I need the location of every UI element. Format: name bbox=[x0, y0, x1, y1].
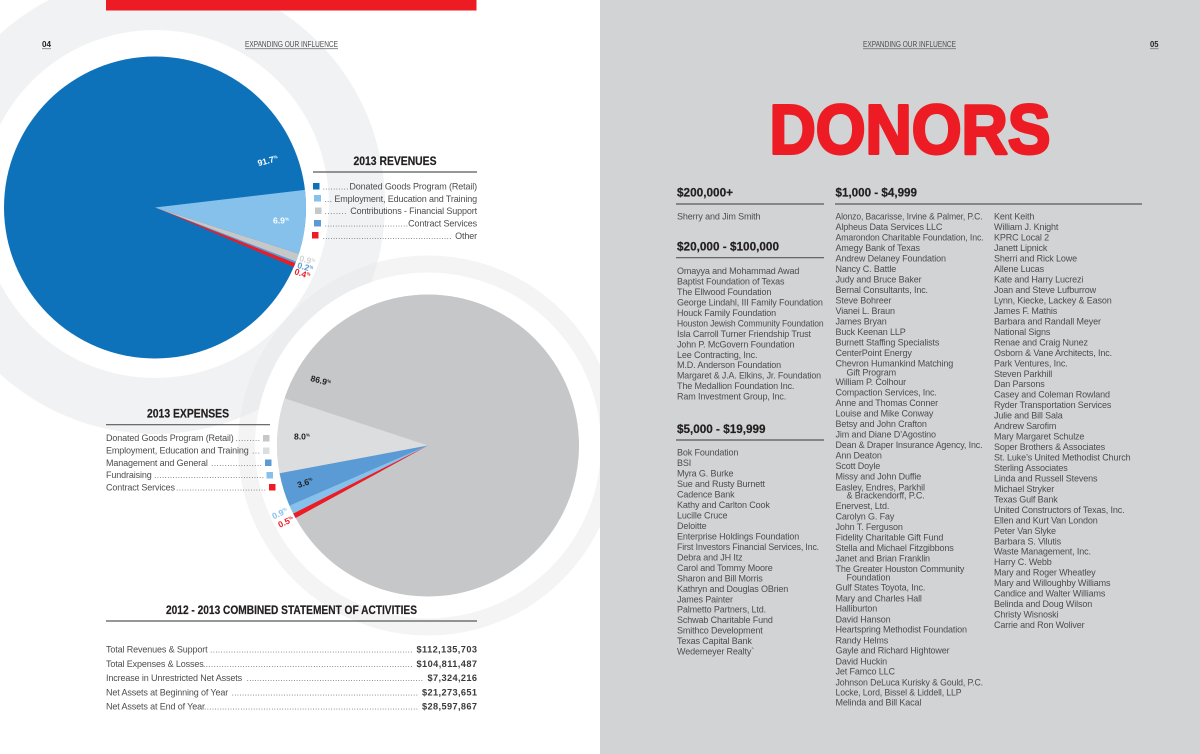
donors tier: $5,000 - $19,999: Bok Foundation bbox=[677, 448, 738, 458]
top red bar bbox=[106, 0, 476, 10]
donor list: column one: William P. Colhour bbox=[836, 377, 906, 387]
donor list: column one: Foundation bbox=[846, 572, 890, 582]
donor list: column two: Dan Parsons bbox=[994, 379, 1045, 389]
donor list: column one: Buck Keenan LLP bbox=[836, 327, 906, 337]
donors tier: $5,000 - $19,999: First Investors Financial Services, Inc. bbox=[677, 542, 819, 552]
label: 3.6%: 3.6 bbox=[296, 477, 310, 490]
donor list: column two: Kent Keith bbox=[994, 212, 1034, 222]
donor list: column one: Easley, Endres, Parkhil bbox=[836, 482, 925, 492]
row: net assets end bbox=[106, 702, 477, 712]
donor list: column one: Carolyn G. Fay bbox=[836, 511, 895, 521]
donor list: column two: Mary Margaret Schulze bbox=[994, 432, 1084, 442]
donors tier: $5,000 - $19,999: Carol and Tommy Moore bbox=[677, 563, 773, 573]
legend row: contract services: Contract Services bbox=[106, 482, 175, 492]
pie chart: 2013 expenses bbox=[270, 294, 579, 596]
legend row: employment: Employment, Education and Training bbox=[334, 194, 477, 204]
donors tier: $20,000 - $100,000: John P. McGovern Foundation bbox=[677, 339, 795, 349]
label: 8.0%: % bbox=[306, 432, 310, 438]
legend row: fundraising: Fundraising bbox=[106, 470, 152, 480]
label: 0.5%: % bbox=[288, 515, 293, 521]
donors tier: $20,000 - $100,000: The Ellwood Foundation bbox=[677, 287, 771, 297]
row: net assets end: ................................................................................... bbox=[204, 702, 418, 712]
donor list: column two: Texas Gulf Bank bbox=[994, 494, 1058, 504]
donor list: column two: Steven Parkhill bbox=[994, 369, 1052, 379]
donor list: column one: Gulf States Toyota, Inc. bbox=[836, 583, 925, 593]
slice: employment 6.9% bbox=[155, 190, 306, 254]
row: net assets beginning: Net Assets at Beginning of Year bbox=[106, 688, 228, 698]
background ring: revenues bbox=[0, 0, 385, 434]
donor list: column two: Sterling Associates bbox=[994, 463, 1068, 473]
donor list: column one: Janet and Brian Franklin bbox=[836, 553, 930, 563]
slice: contract services 0.5% bbox=[293, 446, 428, 518]
left page header: EXPANDING OUR INFLUENCE bbox=[245, 40, 338, 49]
donor list: column one: Gayle and Richard Hightower bbox=[836, 646, 950, 656]
donors tier: $5,000 - $19,999: Palmetto Partners, Ltd. bbox=[677, 605, 766, 615]
donors tier: $5,000 - $19,999: Debra and JH Itz bbox=[677, 552, 743, 562]
slice: fundraising 0.9% bbox=[290, 446, 428, 514]
donor list: column one: Alonzo, Bacarisse, Irvine & Palmer, P.C. bbox=[836, 212, 982, 222]
legend row: contract services bbox=[314, 218, 478, 228]
legend row: fundraising: .......................................... bbox=[154, 470, 264, 480]
donors tier: $20,000 - $100,000: Isla Carroll Turner Friendship Trust bbox=[677, 329, 811, 339]
legend row: employment: ... bbox=[252, 446, 260, 456]
donors tier: $5,000 - $19,999: Wedemeyer Realty` bbox=[677, 647, 754, 657]
legend row: contract services: Contract Services bbox=[408, 218, 478, 228]
label: 0.9%: 0.9 bbox=[270, 507, 285, 521]
donors tier: $20,000 - $100,000: Houston Jewish Community Foundation bbox=[677, 318, 824, 328]
legend row: management bbox=[106, 458, 272, 468]
left page header bbox=[42, 40, 338, 49]
donor list: column two: Janett Lipnick bbox=[994, 243, 1048, 253]
row: increase in net assets: .................................................................... bbox=[246, 673, 423, 683]
donor list: column one: Amegy Bank of Texas bbox=[836, 243, 921, 253]
donor list: column one: Halliburton bbox=[836, 604, 877, 614]
donor list: column two: Harry C. Webb bbox=[994, 557, 1052, 567]
donor list: column one: CenterPoint Energy bbox=[836, 348, 912, 358]
legend: 2013 expenses bbox=[106, 408, 276, 492]
legend row: fundraising bbox=[106, 470, 273, 480]
donor list: column two: Renae and Craig Nunez bbox=[994, 337, 1088, 347]
donors tier: $200,000+ bbox=[676, 188, 824, 222]
donors tier: $5,000 - $19,999: Texas Capital Bank bbox=[677, 636, 752, 646]
donor list: column one: Bernal Consultants, Inc. bbox=[836, 285, 928, 295]
label: 0.5%: 0.5 bbox=[276, 516, 291, 530]
pie chart: 2013 revenues bbox=[4, 56, 316, 358]
donor list: column one: Ann Deaton bbox=[836, 451, 882, 461]
label: 0.4%: % bbox=[306, 271, 311, 277]
legend: 2013 revenues bbox=[312, 156, 478, 241]
donor list: column two: St. Luke’s United Methodist Church bbox=[994, 452, 1131, 462]
donor list: column two: Joan and Steve Lufburrow bbox=[994, 285, 1097, 295]
donor list: column one: Gift Program bbox=[846, 367, 896, 377]
title: donors: DONORS bbox=[770, 90, 1050, 168]
legend row: contract services: ................................ bbox=[324, 218, 408, 228]
label: 86.9%: % bbox=[327, 378, 332, 384]
row: total revenues: Total Revenues & Support bbox=[106, 644, 208, 654]
donor list: column one: David Hanson bbox=[836, 614, 891, 624]
slice: management 3.6% bbox=[280, 446, 428, 506]
donor list: column one: Randy Helms bbox=[836, 635, 889, 645]
donors tier: $5,000 - $19,999: Enterprise Holdings Foundation bbox=[677, 532, 799, 542]
donor list: column one: Mary and Charles Hall bbox=[836, 593, 922, 603]
row: net assets beginning: ........................................................................ bbox=[232, 688, 418, 698]
row: increase in net assets bbox=[106, 673, 477, 683]
donor list: column one: Anne and Thomas Conner bbox=[836, 398, 938, 408]
right page header: 05 bbox=[1150, 40, 1159, 49]
donor list: column two: Candice and Walter Williams bbox=[994, 589, 1106, 599]
donor list: column two: William J. Knight bbox=[994, 222, 1059, 232]
donors tier: $5,000 - $19,999: Myra G. Burke bbox=[677, 469, 733, 479]
white halo: expenses bbox=[255, 272, 601, 618]
legend row: donated goods: Donated Goods Program (Retail) bbox=[106, 433, 234, 443]
label: 3.6%: % bbox=[308, 476, 313, 482]
donors tier: $200,000+: $200,000+ bbox=[677, 188, 733, 200]
label: 6.9%: 6.9 bbox=[273, 216, 285, 226]
donors tier: $20,000 - $100,000: Ram Investment Group, Inc. bbox=[677, 392, 786, 402]
label: 0.9%: % bbox=[311, 257, 316, 263]
row: total revenues: .............................................................................. bbox=[210, 644, 412, 654]
donor list: column one: Fidelity Charitable Gift Fund bbox=[836, 532, 943, 542]
row: total expenses: $104,811,487 bbox=[416, 659, 477, 669]
donor list: column one: Chevron Humankind Matching bbox=[836, 358, 953, 368]
label: 0.4%: 0.4 bbox=[293, 266, 308, 280]
left page header: 04 bbox=[42, 40, 52, 49]
donor list: column two: Mary and Roger Wheatley bbox=[994, 568, 1096, 578]
donors tier: $20,000 - $100,000: Omayya and Mohammad Awad bbox=[677, 266, 799, 276]
legend row: donated goods: ......... bbox=[236, 433, 260, 443]
row: increase in net assets: Increase in Unrestricted Net Assets bbox=[106, 673, 243, 683]
donor list: column one: & Brackendorff, P.C. bbox=[846, 491, 925, 501]
donor list: column two: Waste Management, Inc. bbox=[994, 547, 1091, 557]
label: 86.9%: 86.9 bbox=[309, 373, 328, 387]
label: 8.0%: 8.0 bbox=[294, 432, 306, 442]
donor list: column two: Allene Lucas bbox=[994, 264, 1045, 274]
legend row: contributions: Contributions - Financial Support bbox=[350, 206, 478, 216]
donor list: column one: Betsy and John Crafton bbox=[836, 419, 927, 429]
donor list: column two: Soper Brothers & Associates bbox=[994, 442, 1106, 452]
donors tier: $5,000 - $19,999: Schwab Charitable Fund bbox=[677, 615, 773, 625]
label: 91.7%: 91.7 bbox=[256, 154, 275, 168]
donors tier: $5,000 - $19,999: Deloitte bbox=[677, 521, 707, 531]
donors tier: $1,000 - $4,999 bbox=[835, 188, 1142, 708]
donor list: column two: Kate and Harry Lucrezi bbox=[994, 274, 1083, 284]
statement of activities bbox=[106, 605, 477, 712]
donors tier: $1,000 - $4,999: $1,000 - $4,999 bbox=[836, 188, 917, 200]
donor list: column one: Locke, Lord, Bissel & Liddell, LLP bbox=[836, 688, 962, 698]
donor list: column two: Andrew Sarofim bbox=[994, 421, 1056, 431]
legend row: other: Other bbox=[455, 231, 477, 241]
donor list: column one: Heartspring Methodist Foundation bbox=[836, 625, 967, 635]
donor list: column one: Melinda and Bill Kacal bbox=[836, 698, 921, 708]
donors tier: $20,000 - $100,000: Baptist Foundation of Texas bbox=[677, 276, 785, 286]
donor list: column one: Dean & Draper Insurance Agency, Inc. bbox=[836, 440, 982, 450]
heading: 2013 revenues: 2013 REVENUES bbox=[354, 156, 437, 168]
donor list: column two: Julie and Bill Sala bbox=[994, 411, 1063, 421]
right page header: EXPANDING OUR INFLUENCE bbox=[863, 40, 956, 49]
donor list: column one: Vianei L. Braun bbox=[836, 306, 895, 316]
donors tier: $5,000 - $19,999: Sharon and Bill Morris bbox=[677, 573, 763, 583]
slice: other 0.4% bbox=[155, 208, 295, 267]
heading: 2013 expenses: 2013 EXPENSES bbox=[147, 408, 229, 420]
row: total expenses: ................................................................................ bbox=[203, 659, 412, 669]
donor list: column one: Amarondon Charitable Foundation, Inc. bbox=[836, 233, 984, 243]
donor list: column two: Carrie and Ron Woliver bbox=[994, 620, 1085, 630]
donors tier: $20,000 - $100,000: Houck Family Foundation bbox=[677, 308, 776, 318]
donor list: column two: Sherri and Rick Lowe bbox=[994, 254, 1077, 264]
donors tier: $20,000 - $100,000: $20,000 - $100,000 bbox=[677, 242, 779, 254]
donor list: column one: Nancy C. Battle bbox=[836, 264, 896, 274]
donor list: column two: Mary and Willoughby Williams bbox=[994, 578, 1111, 588]
legend row: contract services bbox=[106, 482, 276, 492]
donor list: column one: Alpheus Data Services LLC bbox=[836, 222, 943, 232]
donors tier: $5,000 - $19,999: Kathryn and Douglas OBrien bbox=[677, 584, 788, 594]
panel: left page background bbox=[0, 0, 600, 754]
donor list: column two: Casey and Coleman Rowland bbox=[994, 390, 1110, 400]
panel: right page background bbox=[600, 0, 1200, 754]
label: 0.2%: 0.2 bbox=[296, 260, 310, 273]
donor list: column two: Ryder Transportation Services bbox=[994, 400, 1112, 410]
donor list: column one: Andrew Delaney Foundation bbox=[836, 254, 946, 264]
donors tier: $200,000+: Sherry and Jim Smith bbox=[677, 212, 761, 222]
donor list: column one: Stella and Michael Fitzgibbons bbox=[836, 543, 954, 553]
legend row: contributions: ........ bbox=[324, 206, 346, 216]
donor list: column one: Jim and Diane D’Agostino bbox=[836, 429, 936, 439]
donor list: column two: Michael Stryker bbox=[994, 484, 1054, 494]
row: total revenues: $112,135,703 bbox=[416, 644, 477, 654]
slice: contract services 0.2% bbox=[155, 208, 296, 263]
legend row: management: Management and General bbox=[106, 458, 208, 468]
donors tier: $20,000 - $100,000 bbox=[676, 242, 824, 402]
donor list: column two: Christy Wisnoski bbox=[994, 610, 1059, 620]
row: net assets end: Net Assets at End of Year bbox=[106, 702, 205, 712]
donor list: column two: National Signs bbox=[994, 327, 1051, 337]
donor list: column one: Enervest, Ltd. bbox=[836, 501, 889, 511]
row: net assets beginning: $21,273,651 bbox=[422, 688, 477, 698]
donor list: column one: Johnson DeLuca Kurisky & Gould, P.C. bbox=[836, 677, 983, 687]
right page header bbox=[863, 40, 1159, 49]
donors tier: $20,000 - $100,000: M.D. Anderson Foundation bbox=[677, 360, 781, 370]
donor list: column two: Park Ventures, Inc. bbox=[994, 358, 1068, 368]
donor list: column two: Barbara S. Vilutis bbox=[994, 536, 1062, 546]
label: 6.9%: % bbox=[285, 216, 289, 222]
donor list: column two: Barbara and Randall Meyer bbox=[994, 316, 1101, 326]
donors tier: $20,000 - $100,000: Lee Contracting, Inc. bbox=[677, 350, 757, 360]
donor list: column one: Burnett Staffing Specialists bbox=[836, 337, 940, 347]
donors tier: $20,000 - $100,000: The Medallion Foundation Inc. bbox=[677, 381, 794, 391]
label: 0.2%: % bbox=[309, 264, 314, 270]
white halo: revenues bbox=[0, 30, 329, 378]
donors tier: $20,000 - $100,000: Margaret & J.A. Elkins, Jr. Foundation bbox=[677, 371, 821, 381]
donor list: column two: KPRC Local 2 bbox=[994, 233, 1049, 243]
donor list: column two: Linda and Russell Stevens bbox=[994, 474, 1098, 484]
donor list: column one: Judy and Bruce Baker bbox=[836, 274, 922, 284]
donor list: column one: Compaction Services, Inc. bbox=[836, 388, 937, 398]
donor list: column one: James Bryan bbox=[836, 316, 887, 326]
label: 0.9%: 0.9 bbox=[298, 253, 312, 266]
row: total expenses: Total Expenses & Losses bbox=[106, 659, 204, 669]
donors tier: $5,000 - $19,999: Kathy and Carlton Cook bbox=[677, 500, 770, 510]
row: increase in net assets: $7,324,216 bbox=[428, 673, 477, 683]
row: net assets end: $28,597,867 bbox=[422, 702, 477, 712]
donor list: column one: Jet Famco LLC bbox=[836, 667, 895, 677]
donors tier: $5,000 - $19,999 bbox=[676, 424, 824, 657]
donor list: column two: Osborn & Vane Architects, Inc. bbox=[994, 348, 1112, 358]
donor list: column two: Peter Van Slyke bbox=[994, 526, 1056, 536]
legend row: employment: ... bbox=[324, 194, 332, 204]
legend row: donated goods: Donated Goods Program (Retail) bbox=[349, 182, 477, 192]
donor list: column one: David Huckin bbox=[836, 656, 887, 666]
legend row: management: ................... bbox=[211, 458, 262, 468]
donor list: column two: United Constructors of Texas, Inc. bbox=[994, 505, 1124, 515]
donor list: column one: John T. Ferguson bbox=[836, 522, 903, 532]
donors tier: $5,000 - $19,999: Cadence Bank bbox=[677, 490, 735, 500]
donor list: column two: Lynn, Kiecke, Lackey & Eason bbox=[994, 296, 1112, 306]
donor list: column one: Steve Bohreer bbox=[836, 296, 891, 306]
heading: statement of activities: 2012 - 2013 COMBINED STATEMENT OF ACTIVITIES bbox=[166, 605, 417, 617]
label: 0.9%: % bbox=[282, 506, 287, 513]
donors tier: $5,000 - $19,999: $5,000 - $19,999 bbox=[677, 424, 766, 436]
donors tier: $5,000 - $19,999: Lucille Cruce bbox=[677, 510, 727, 520]
donors tier: $5,000 - $19,999: Smithco Development bbox=[677, 626, 763, 636]
donor list: column one: Louise and Mike Conway bbox=[836, 408, 934, 418]
donor list: column one: Missy and John Duffie bbox=[836, 472, 921, 482]
donor list: column two bbox=[994, 212, 1131, 630]
row: total revenues bbox=[106, 644, 477, 654]
donor list: column one: Scott Doyle bbox=[836, 461, 880, 471]
row: net assets beginning bbox=[106, 688, 477, 698]
label: 91.7%: % bbox=[273, 154, 278, 160]
donor list: column two: Ellen and Kurt Van London bbox=[994, 515, 1098, 525]
donor list: column two: James F. Mathis bbox=[994, 306, 1058, 316]
donor list: column one bbox=[836, 212, 984, 708]
legend row: contract services: .................................. bbox=[176, 482, 266, 492]
donor list: column two: Belinda and Doug Wilson bbox=[994, 599, 1092, 609]
slice: employment 8.0% bbox=[277, 398, 428, 473]
row: total expenses bbox=[106, 659, 477, 669]
legend row: employment: Employment, Education and Training bbox=[106, 446, 249, 456]
donors tier: $5,000 - $19,999: James Painter bbox=[677, 594, 733, 604]
slice: contributions 0.9% bbox=[155, 208, 299, 262]
legend row: other: .................................................. bbox=[322, 231, 452, 241]
legend row: donated goods: .......... bbox=[322, 182, 348, 192]
donors tier: $5,000 - $19,999: Sue and Rusty Burnett bbox=[677, 479, 765, 489]
background ring: expenses bbox=[238, 256, 618, 636]
donor list: column one: The Greater Houston Community bbox=[836, 564, 965, 574]
donors tier: $20,000 - $100,000: George Lindahl, III Family Foundation bbox=[677, 297, 823, 307]
donors tier: $5,000 - $19,999: BSI bbox=[677, 458, 691, 468]
